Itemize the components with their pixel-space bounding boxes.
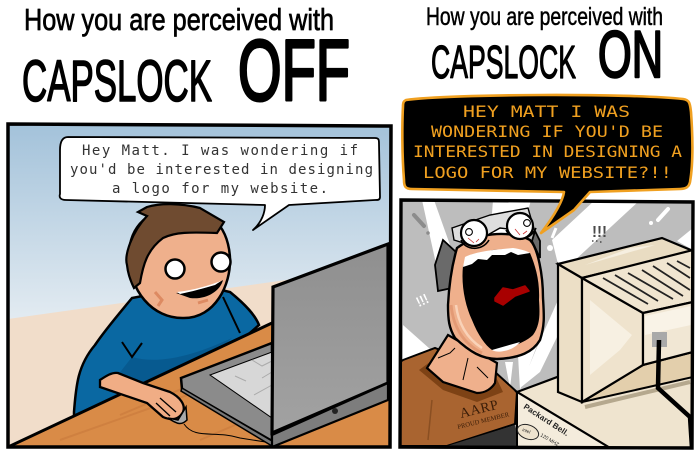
heading line: how you are perceived with: How you are perceived with xyxy=(24,2,334,37)
sky background xyxy=(8,124,391,324)
desktop case xyxy=(514,376,690,446)
intel badge xyxy=(517,424,540,440)
motion marks: !!! xyxy=(413,290,431,310)
tongue xyxy=(495,286,529,305)
character: gray hair xyxy=(435,240,457,291)
monitor side xyxy=(558,264,582,402)
monitor stand xyxy=(582,352,693,402)
monitor top band xyxy=(558,238,693,278)
character: blue shirt xyxy=(74,285,259,426)
computer: intel xyxy=(522,427,531,435)
white rays xyxy=(403,200,693,390)
speech bubble: calm xyxy=(60,137,380,230)
bubble text: a logo for my website. xyxy=(112,181,328,197)
title: left heading xyxy=(22,2,350,119)
port and cable xyxy=(652,332,667,347)
speech bubble: shouting xyxy=(402,95,692,233)
heading word: capslock: CAPSLOCK xyxy=(431,36,576,88)
bubble text: INTERESTED IN DESIGNING A xyxy=(413,142,682,161)
monitor rear xyxy=(643,302,693,365)
mouth xyxy=(176,280,223,298)
bubble text: HEY MATT I WAS xyxy=(463,102,630,121)
panel: capslock off scene xyxy=(8,124,391,447)
character: brown shirt: PROUD MEMBER xyxy=(457,411,511,431)
character: arm and hand xyxy=(100,373,184,419)
computer: 120 MHZ xyxy=(539,433,560,448)
character: brown shirt xyxy=(400,348,522,449)
case brand text: Packard Bell. xyxy=(522,402,570,438)
mouse and cord xyxy=(168,404,265,442)
bubble text xyxy=(70,143,373,197)
bubble text xyxy=(413,102,682,182)
mouth xyxy=(462,248,539,352)
laptop keyboard xyxy=(210,352,272,418)
bubble text: you'd be interested in designing xyxy=(70,162,373,178)
monitor vented top xyxy=(582,250,693,313)
computer xyxy=(515,238,694,448)
motion marks xyxy=(413,209,668,310)
heading word: off: OFF xyxy=(238,23,350,119)
bubble text: LOGO FOR MY WEBSITE?!! xyxy=(423,163,672,182)
character: head xyxy=(126,204,230,318)
laptop xyxy=(181,244,388,447)
shirt logo: AARP xyxy=(458,398,500,422)
desk xyxy=(15,325,388,446)
background xyxy=(402,202,692,428)
heading word: capslock: CAPSLOCK xyxy=(22,49,212,114)
panel frame xyxy=(400,200,693,448)
bubble text: Hey Matt. I was wondering if xyxy=(82,143,358,159)
eyes xyxy=(166,260,184,278)
character: neck xyxy=(427,335,497,393)
panel: capslock on scene xyxy=(400,95,694,449)
title: right heading xyxy=(426,3,663,91)
panel frame xyxy=(8,124,391,447)
monitor shadow xyxy=(585,382,690,407)
monitor front xyxy=(582,278,643,402)
character: head xyxy=(448,234,544,359)
laptop lid xyxy=(272,244,388,433)
glasses xyxy=(452,208,536,248)
hair xyxy=(126,204,224,288)
bubble text: WONDERING IF YOU'D BE xyxy=(431,122,663,141)
exclamation marks: !!! xyxy=(592,224,607,241)
heading word: on: ON xyxy=(598,17,663,91)
laptop base xyxy=(181,343,272,441)
wall xyxy=(10,280,288,444)
